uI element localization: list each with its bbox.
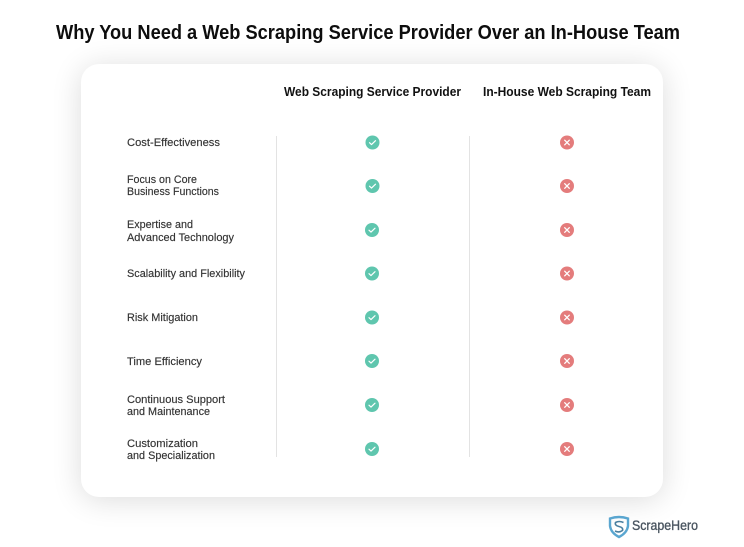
title: Why You Need a Web Scraping Service Provider Over an In-House Team xyxy=(56,22,680,44)
row labels: Scalability and Flexibility xyxy=(127,268,245,280)
row labels: Risk Mitigation xyxy=(127,312,198,324)
row labels: Advanced Technology xyxy=(127,232,234,244)
row labels: Expertise and xyxy=(127,219,193,231)
column heading: in-house: In-House Web Scraping Team xyxy=(483,84,651,99)
logo: ScrapeHero xyxy=(610,517,698,537)
wordmark: ScrapeHero xyxy=(632,518,698,533)
row labels: Time Efficiency xyxy=(127,356,203,368)
icons: provider check marks xyxy=(365,136,380,456)
icons: in-house cross marks xyxy=(560,136,574,456)
row labels: Cost-Effectiveness xyxy=(127,137,220,149)
row labels: Focus on Core xyxy=(127,174,197,186)
row labels: Business Functions xyxy=(127,186,219,198)
row labels: and Maintenance xyxy=(127,406,210,418)
row labels xyxy=(127,137,245,462)
row labels: Continuous Support xyxy=(127,394,225,406)
icon: shield xyxy=(610,517,628,537)
column heading: provider: Web Scraping Service Provider xyxy=(284,84,461,99)
row labels: and Specialization xyxy=(127,450,215,462)
panel: comparison card xyxy=(81,64,663,497)
row labels: Customization xyxy=(127,438,198,450)
